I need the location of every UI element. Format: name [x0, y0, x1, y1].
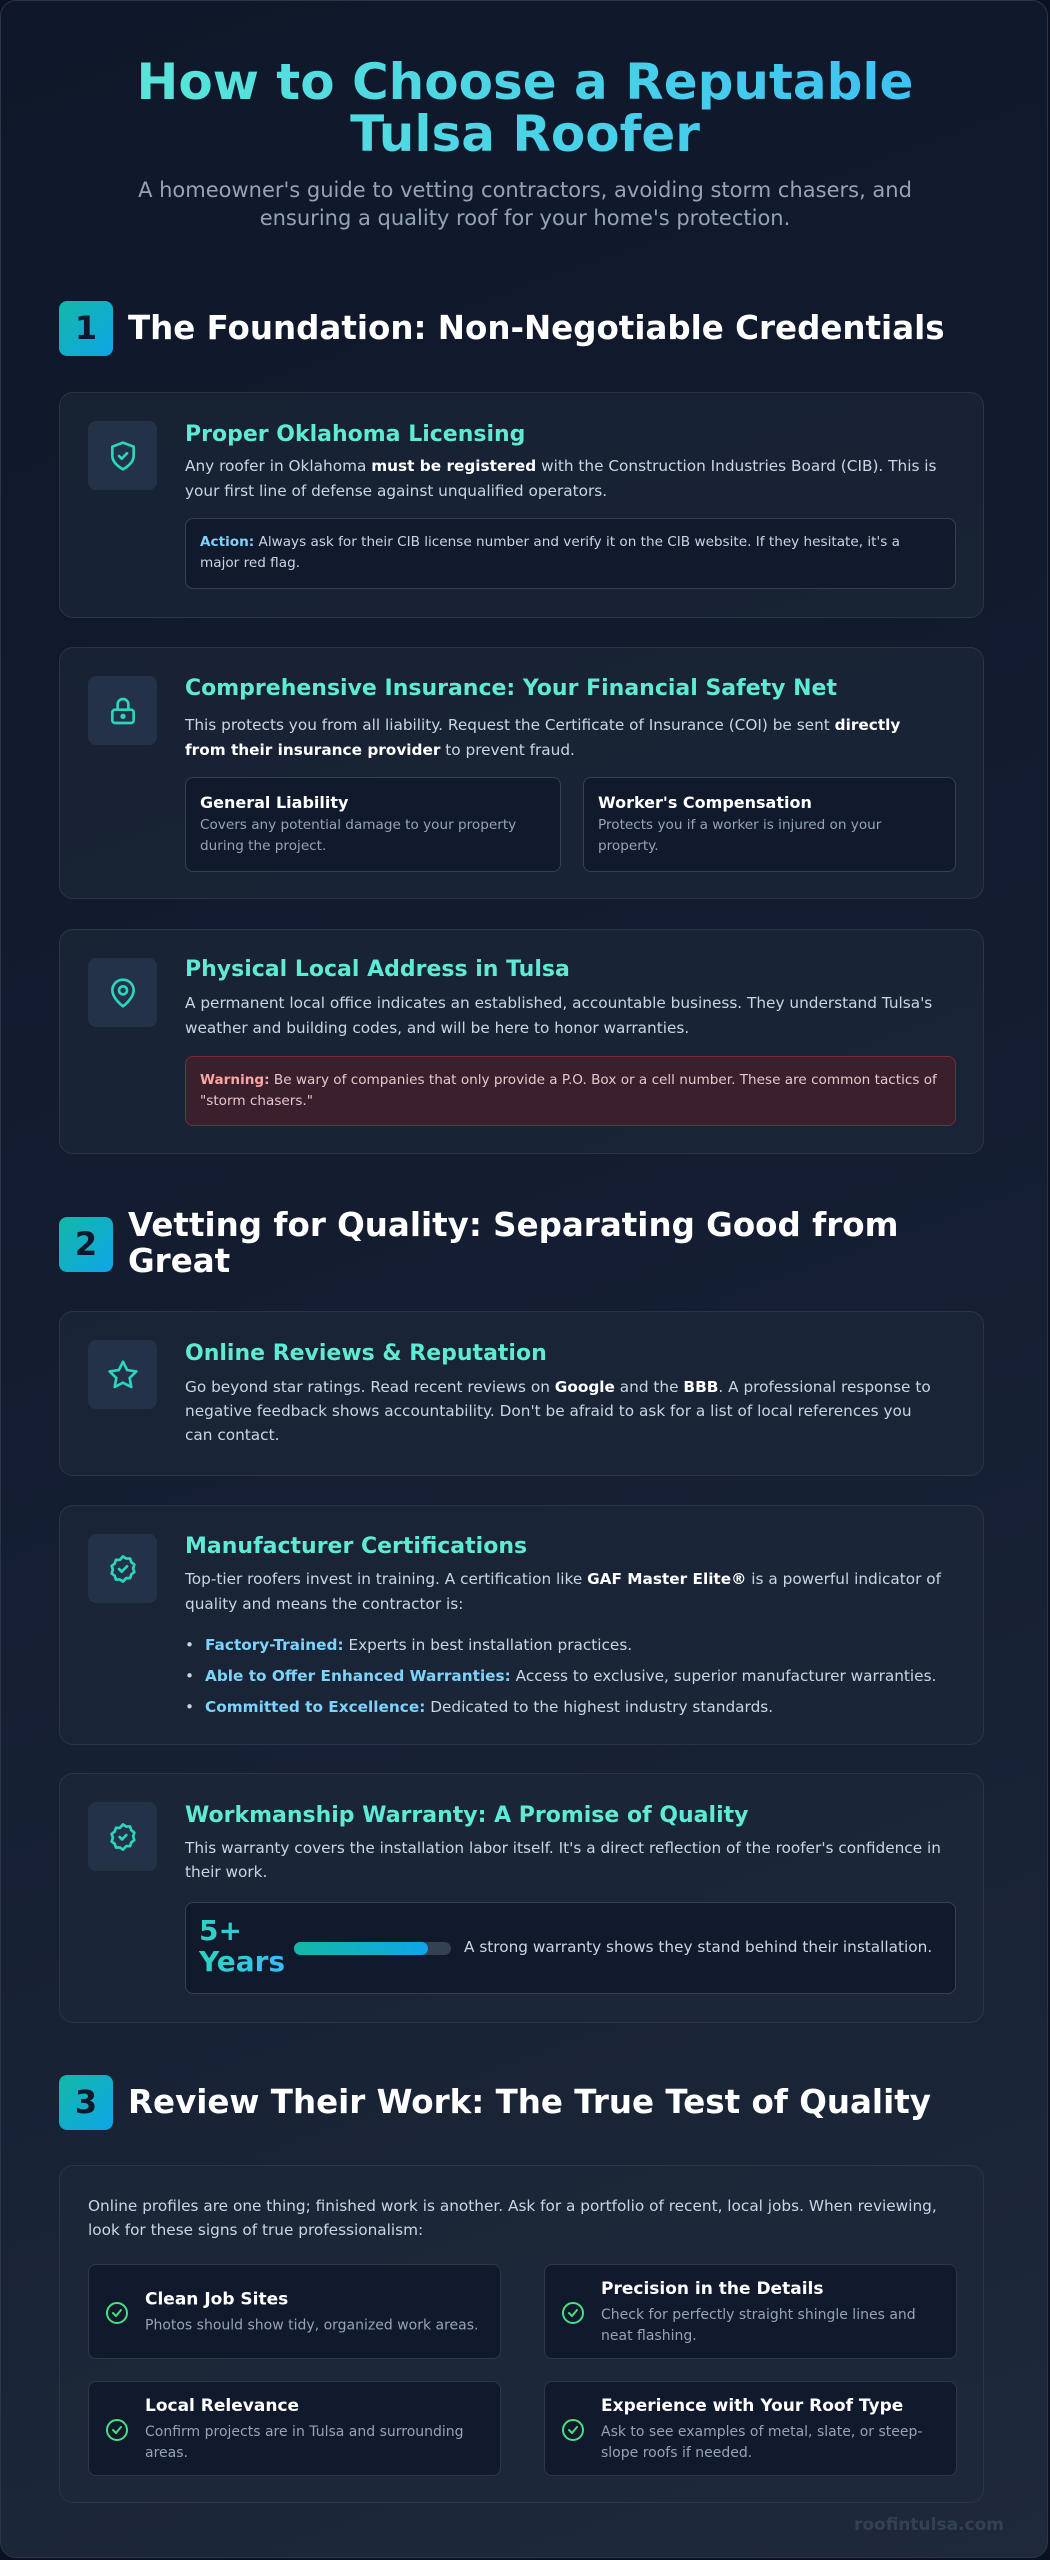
callout: warning — [185, 1056, 956, 1126]
title: How to Choose a Reputable — [137, 53, 913, 111]
watermark: roofintulsa.com — [854, 2515, 1004, 2535]
title: Tulsa Roofer — [350, 105, 700, 163]
item: roof type: Ask to see examples of metal, slate, or steep-slope roofs if needed. — [601, 2424, 922, 2460]
callout: 5+ years — [185, 1902, 956, 1994]
icon: shield check — [88, 421, 157, 490]
item: local relevance: Confirm projects are in Tulsa and surrounding areas. — [145, 2424, 464, 2460]
text: certifications: Top-tier roofers invest in training. A certification like GAF Master Elite® is a powerful indicator of quality and means the contractor is: — [185, 1570, 941, 1613]
section 2 badge — [59, 1217, 113, 1272]
list: certification benefits: Factory-Trained: Experts in best installation practices. — [205, 1636, 632, 1654]
list: certification benefits — [185, 1636, 936, 1716]
item: precision — [544, 2264, 957, 2359]
heading: address: Physical Local Address in Tulsa — [185, 957, 570, 982]
panel: licensing — [59, 392, 984, 618]
icon: star — [88, 1340, 157, 1409]
text: licensing: Any roofer in Oklahoma must be registered with the Construction Industries Board (CIB). This is your first line of defense against unqualified operators. — [185, 457, 936, 500]
icon: badge check — [88, 1534, 157, 1603]
sub-panel: workers comp — [583, 777, 956, 872]
item: precision: Check for perfectly straight shingle lines and neat flashing. — [601, 2306, 916, 2344]
section 2 heading: Vetting for Quality: Separating Good from Great — [128, 1206, 898, 1280]
section 1 badge: 1 — [75, 309, 97, 347]
heading: insurance: Comprehensive Insurance: Your Financial Safety Net — [185, 676, 837, 701]
section 3 badge: 3 — [75, 2083, 97, 2121]
panel: review work — [59, 2165, 984, 2503]
heading: certifications: Manufacturer Certifications — [185, 1534, 527, 1559]
item: roof type: Experience with Your Roof Type — [601, 2396, 903, 2416]
icon: map pin — [88, 958, 157, 1027]
item: roof type — [544, 2381, 957, 2476]
list: certification benefits: • — [185, 1667, 194, 1685]
list: certification benefits: • — [185, 1698, 194, 1716]
text: reviews: Go beyond star ratings. Read recent reviews on Google and the BBB. A professional response to negative feedback shows accountability. Don't be afraid to ask for a list of local references you can contact. — [185, 1378, 931, 1444]
item: clean job sites — [88, 2264, 501, 2359]
sub-panel: general liability — [185, 777, 561, 872]
heading: reviews: Online Reviews & Reputation — [185, 1341, 547, 1366]
sub-panel: general liability: Covers any potential damage to your property during the project. — [200, 817, 516, 854]
panel: insurance — [59, 647, 984, 899]
section 2 badge: 2 — [75, 1225, 97, 1263]
sub-panel: general liability: General Liability — [200, 793, 348, 812]
callout: action: Action: Always ask for their CIB license number and verify it on the CIB website. If they hesitate, it's a major red flag. — [200, 534, 900, 571]
text: address: A permanent local office indicates an established, accountable business. They understand Tulsa's weather and building codes, and will be here to honor warranties. — [185, 994, 932, 1037]
section 1 heading: The Foundation: Non-Negotiable Credentials — [128, 309, 945, 347]
panel: reviews — [59, 1311, 984, 1476]
title — [1, 56, 1049, 160]
sub-panel: workers comp: Protects you if a worker is injured on your property. — [598, 817, 881, 854]
list: certification benefits: Able to Offer Enhanced Warranties: Access to exclusive, superior manufacturer warranties. — [205, 1667, 936, 1685]
text: warranty: This warranty covers the installation labor itself. It's a direct reflection of the roofer's confidence in their work. — [185, 1839, 941, 1881]
icon: lock — [88, 676, 157, 745]
stat: 5+ years: Years — [199, 1945, 285, 1978]
text: warranty note: A strong warranty shows they stand behind their installation. — [464, 1938, 932, 1956]
list: certification benefits: Committed to Excellence: Dedicated to the highest industry standards. — [205, 1698, 773, 1716]
item: clean job sites: Clean Job Sites — [145, 2289, 288, 2309]
section 3 badge — [59, 2075, 113, 2130]
text: insurance: This protects you from all liability. Request the Certificate of Insurance (COI) be sent directly from their insurance provider to prevent fraud. — [185, 716, 900, 759]
callout: action — [185, 518, 956, 589]
progress bar — [294, 1942, 451, 1955]
item: local relevance — [88, 2381, 501, 2476]
heading: warranty: Workmanship Warranty: A Promise of Quality — [185, 1803, 748, 1828]
text: intro: Online profiles are one thing; finished work is another. Ask for a portfolio of recent, local jobs. When reviewing, look for these signs of true professionalism: — [88, 2197, 937, 2239]
panel: warranty — [59, 1773, 984, 2023]
section 3 heading: Review Their Work: The True Test of Quality — [128, 2083, 931, 2121]
callout: warning: Warning: Be wary of companies that only provide a P.O. Box or a cell number. These are common tactics of "storm chasers." — [200, 1072, 937, 1109]
icon: badge — [88, 1802, 157, 1871]
item: precision: Precision in the Details — [601, 2278, 823, 2298]
list: certification benefits: • — [185, 1636, 194, 1654]
panel: certifications — [59, 1505, 984, 1745]
heading: licensing: Proper Oklahoma Licensing — [185, 422, 525, 447]
item: clean job sites: Photos should show tidy, organized work areas. — [145, 2317, 478, 2333]
stat: 5+ years: 5+ — [199, 1914, 242, 1947]
item: local relevance: Local Relevance — [145, 2396, 299, 2416]
sub-panel: workers comp: Worker's Compensation — [598, 793, 812, 812]
section 1 badge — [59, 301, 113, 356]
subtitle: A homeowner's guide to vetting contractors, avoiding storm chasers, and ensuring a quality roof for your home's protection. — [138, 178, 912, 230]
stat: 5+ years — [199, 1915, 285, 1977]
panel: local address — [59, 929, 984, 1154]
